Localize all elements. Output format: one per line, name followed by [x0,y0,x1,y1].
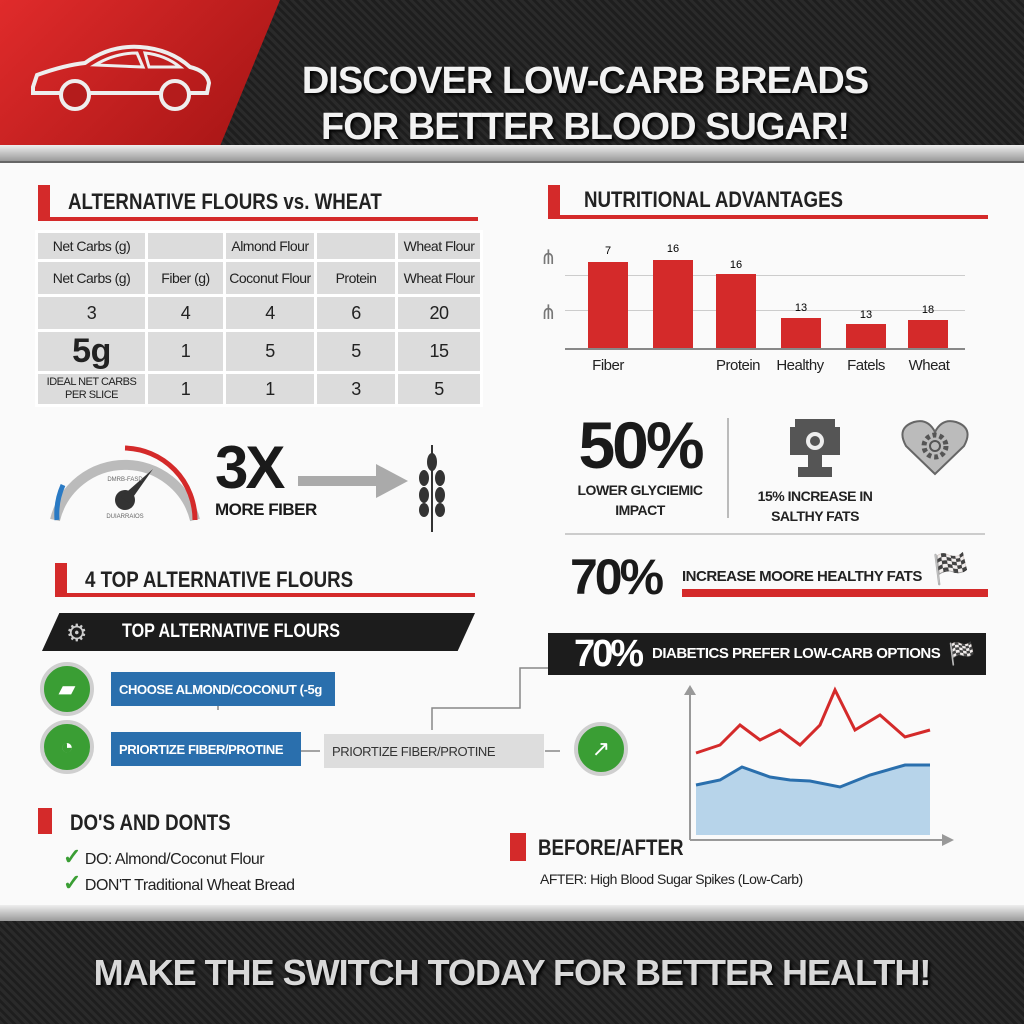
table: 5g [72,332,111,370]
banner: top alternative flours: TOP ALTERNATIVE FLOURS [122,621,340,642]
heading: do's and donts: ✓ DON'T Traditional Wheat Bread [63,870,295,895]
icon: wheat [419,445,445,532]
banner: top alternative flours [42,613,475,651]
stat: 15% increase: 15% INCREASE IN [758,488,872,504]
table: Almond Flour [231,238,309,254]
icon: bread circle [40,662,94,716]
step 3: PRIORTIZE FIBER/PROTINE [332,744,495,758]
heading: nutritional advantages [548,185,988,219]
bar chart: 13 [795,302,807,314]
table [38,233,480,404]
footer [0,905,1024,1024]
icon: heart gear [901,420,969,476]
red corner panel [0,0,280,150]
stat: 70% healthy fats [570,549,988,605]
bar chart: 18 [922,304,934,316]
header background [0,0,1024,160]
title [302,60,871,148]
table: Coconut Flour [229,270,311,286]
table: 5 [434,378,444,398]
stat: 15% increase [758,419,872,524]
table: Fiber (g) [161,270,210,286]
stat: 70% healthy fats: INCREASE MOORE HEALTHY FATS [682,568,922,585]
table: Wheat Flour [404,270,474,286]
step 2: PRIORTIZE FIBER/PROTINE [119,742,283,756]
title: FOR BETTER BLOOD SUGAR! [321,106,849,148]
heading: do's and donts: DO'S AND DONTS [70,810,231,835]
icon: gauge [50,446,200,522]
stat: 50%: LOWER GLYCIEMIC [578,482,702,498]
heading: before/after: AFTER: High Blood Sugar Spikes (Low-Carb) [540,871,803,887]
arrow [298,464,408,498]
bar chart: 7 [605,245,611,257]
table: 20 [429,302,449,322]
stat: 3x more fiber: 3X [215,434,282,501]
stat: 50%: 50% [578,408,702,482]
icon: gauge circle: ◔ [60,734,74,759]
heading: do's and donts: ✓ DO: Almond/Coconut Flour [63,844,264,869]
stat: 70% healthy fats: 70% [570,549,661,605]
table: 15 [429,341,449,361]
panel: main white [0,163,1024,905]
table: 6 [351,302,361,322]
table: 4 [265,302,275,322]
table: 3 [87,302,96,322]
stat: 3x more fiber: MORE FIBER [215,500,317,519]
bar chart: Wheat [909,357,949,374]
heading: 4 top alternative flours [55,563,475,597]
top metal bar [0,145,1024,163]
flow: steps [40,662,628,776]
footer text: MAKE THE SWITCH TODAY FOR BETTER HEALTH! [94,952,930,993]
bar chart: Fatels [847,357,885,374]
table: IDEAL NET CARBS [47,376,136,388]
heading: before/after: BEFORE/AFTER [538,835,683,860]
step 1: CHOOSE ALMOND/COCONUT (-5g [119,682,322,696]
stat: 15% increase: SALTHY FATS [771,508,859,524]
step 1 [111,672,335,706]
bar chart: Healthy [776,357,824,374]
stat: 50% [578,408,703,518]
table: PER SLICE [65,389,118,401]
heading: before/after [510,833,803,887]
table: 1 [181,341,190,361]
banner: top alternative flours: ⚙ [66,620,88,647]
table: 3 [351,378,361,398]
title: DISCOVER LOW-CARB BREADS [302,60,868,102]
bar chart [540,243,965,374]
table: 4 [181,302,190,322]
bar chart: Protein [716,357,760,374]
table: Net Carbs (g) [53,270,130,286]
icon: gauge: DMRB-FASD [107,477,143,483]
heading: nutritional advantages: NUTRITIONAL ADVANTAGES [584,187,843,212]
icon: chart circle: ↗ [592,736,610,761]
bar chart: ⋔ [540,247,557,269]
table: 5 [351,341,361,361]
heading: 4 top alternative flours: 4 TOP ALTERNATIVE FLOURS [85,567,353,592]
step 2 [111,732,301,766]
bar chart: 16 [730,259,742,271]
stat: 70% healthy fats: 🏁 [932,553,969,586]
heading: alternative flours [38,185,478,221]
line chart [684,685,954,846]
step 3 [324,734,544,768]
table: 5 [265,341,275,361]
icon: gauge circle [40,720,94,774]
bar chart: ⋔ [540,302,557,324]
icon: car [31,44,211,111]
stat: 50%: IMPACT [615,502,665,518]
icon: bread circle: ▰ [59,676,75,701]
banner: 70% diabetics [548,633,986,675]
icon: chart circle [574,722,628,776]
banner: 70% diabetics: 70% [574,633,641,675]
banner: 70% diabetics: 🏁 [948,641,975,666]
table: Wheat Flour [404,238,474,254]
stat: 3x more fiber [215,434,317,519]
icon: gauge: DUIARRAIOS [106,514,144,520]
table: Net Carbs (g) [53,238,130,254]
banner: 70% diabetics: DIABETICS PREFER LOW-CARB OPTIONS [652,645,940,662]
table: Protein [336,270,376,286]
heading: alternative flours: ALTERNATIVE FLOURS vs. WHEAT [68,189,382,214]
bar chart: Fiber [592,357,624,374]
table: 1 [181,378,190,398]
bar chart: 16 [667,243,679,255]
bar chart: 13 [860,309,872,321]
table: 1 [265,378,275,398]
heading: do's and donts [38,808,295,895]
